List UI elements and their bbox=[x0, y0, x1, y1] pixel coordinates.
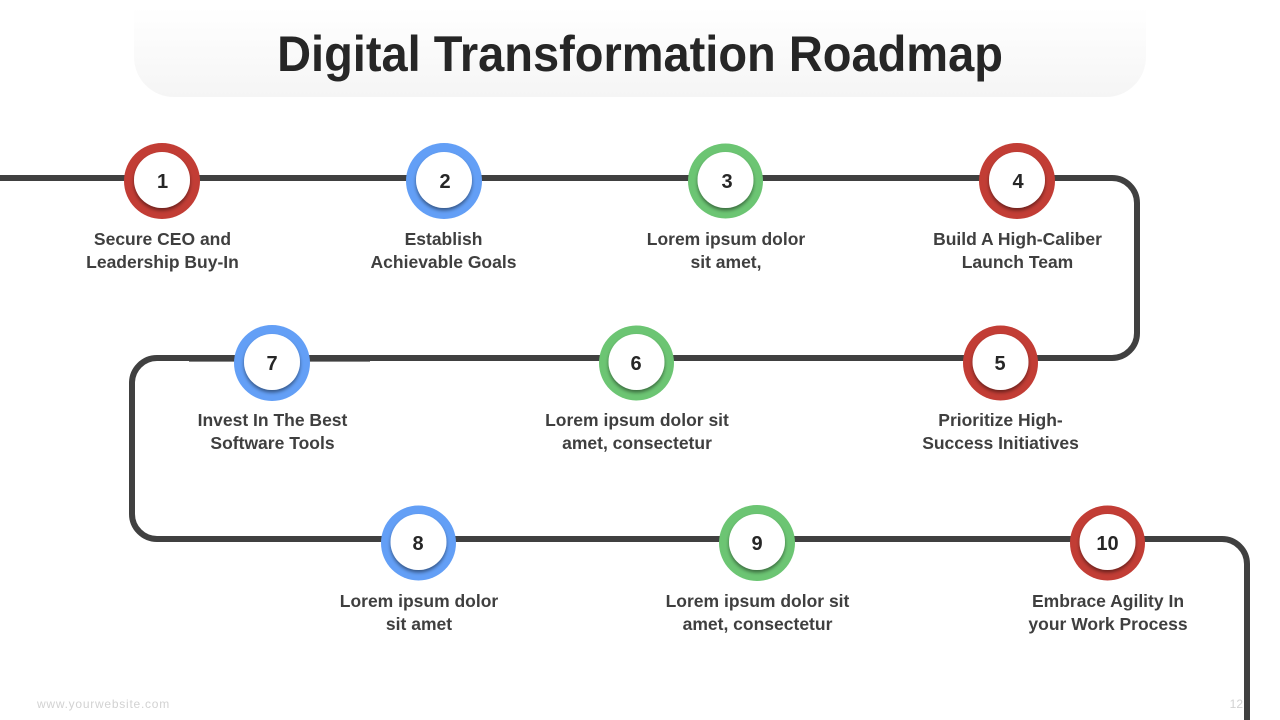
title: Digital Transformation Roadmap bbox=[277, 27, 1003, 82]
step 4: Build A High-Caliber bbox=[933, 229, 1102, 249]
step 9: Lorem ipsum dolor sit bbox=[666, 591, 850, 611]
step 5 bbox=[922, 326, 1079, 453]
step 7 bbox=[198, 325, 348, 453]
roadmap path line bbox=[0, 178, 1247, 720]
title banner bbox=[134, 8, 1146, 97]
step 6: Lorem ipsum dolor sit bbox=[545, 410, 729, 430]
step 7: 7 bbox=[266, 353, 278, 375]
step 4: Launch Team bbox=[962, 252, 1073, 272]
step 2: Achievable Goals bbox=[371, 252, 517, 272]
step 10 bbox=[1028, 506, 1188, 634]
step 2: Establish bbox=[405, 229, 482, 249]
page number: 12 bbox=[1230, 697, 1243, 711]
step 10: your Work Process bbox=[1028, 614, 1188, 634]
step 10: Embrace Agility In bbox=[1032, 591, 1184, 611]
step 1 bbox=[86, 143, 239, 272]
step 7: Software Tools bbox=[210, 433, 335, 453]
step 3 bbox=[647, 144, 805, 272]
step 5: Success Initiatives bbox=[922, 433, 1079, 453]
step 8: sit amet bbox=[386, 614, 452, 634]
step 6: amet, consectetur bbox=[562, 433, 712, 453]
step 4: 4 bbox=[1012, 171, 1024, 193]
step 8: Lorem ipsum dolor bbox=[340, 591, 498, 611]
step 9: 9 bbox=[751, 533, 763, 555]
step 5: Prioritize High- bbox=[938, 410, 1063, 430]
step 8 bbox=[340, 506, 498, 634]
step 8: 8 bbox=[412, 533, 424, 555]
step 1: Secure CEO and bbox=[94, 229, 231, 249]
step 2 bbox=[371, 143, 517, 272]
step 5: 5 bbox=[994, 353, 1006, 375]
step 4 bbox=[933, 143, 1102, 272]
step 7: Invest In The Best bbox=[198, 410, 348, 430]
step 3: sit amet, bbox=[690, 252, 762, 272]
step 9: amet, consectetur bbox=[683, 614, 833, 634]
step 2: 2 bbox=[439, 171, 451, 193]
step 6 bbox=[545, 326, 729, 453]
step 3: 3 bbox=[721, 171, 733, 193]
step 3: Lorem ipsum dolor bbox=[647, 229, 805, 249]
step 1: Leadership Buy-In bbox=[86, 252, 239, 272]
step 9 bbox=[666, 505, 850, 634]
step 10: 10 bbox=[1096, 533, 1119, 555]
footer website: www.yourwebsite.com bbox=[36, 697, 170, 711]
step 6: 6 bbox=[630, 353, 642, 375]
step 1: 1 bbox=[157, 171, 168, 193]
